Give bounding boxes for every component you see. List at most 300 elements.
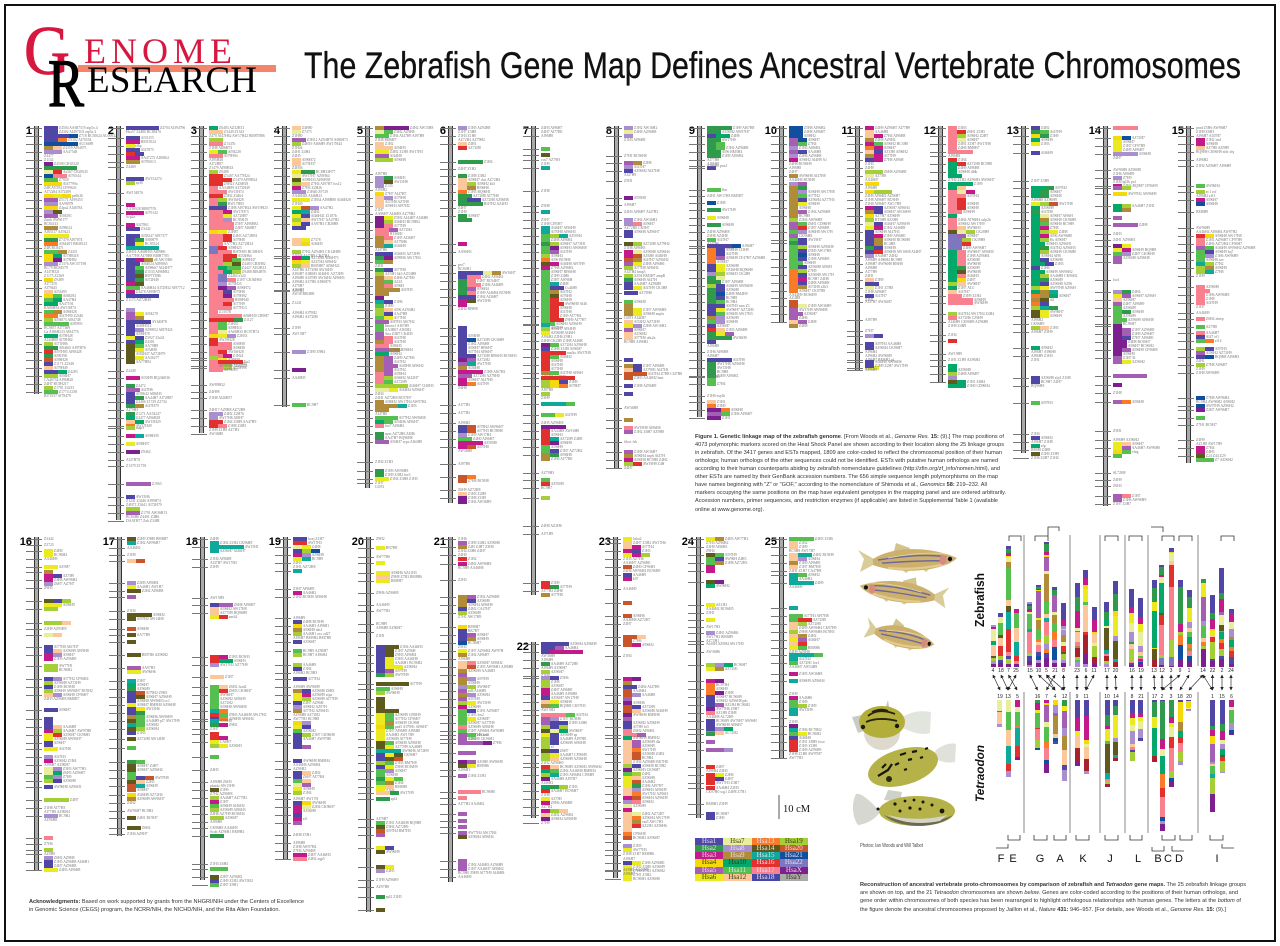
linkage group 15: AI47 zf1: [1206, 335, 1219, 339]
linkage group 9: AI96H8: [726, 320, 738, 324]
linkage group 16: AZ9H9: [44, 852, 55, 856]
linkage group 23: AW96H9 BM9H2: [633, 736, 660, 740]
linkage group 23: [599, 536, 670, 881]
legend: human chromosome colour key: Hsa21: [785, 851, 803, 859]
linkage group 5: Z4H2 AW15H8: [410, 126, 433, 130]
linkage group 6: Z1H6 AI46H9: [482, 283, 503, 287]
linkage group 25: AZ72H8: [813, 618, 826, 622]
linkage group 19: Z1H1 AZ72H8: [293, 565, 315, 569]
linkage group 3: AA68H35 BC97H74: [228, 330, 259, 334]
linkage group 20: AW17H9: [400, 791, 414, 795]
linkage group 23: Z1H6 AZ96H0: [642, 861, 664, 865]
linkage group 17: Z4H1 BC9H7: [137, 816, 158, 820]
linkage group 5: AI84H1: [394, 176, 406, 180]
linkage group 1: Z4283: [68, 370, 78, 374]
linkage group 5: Z1H2: [385, 142, 394, 146]
linkage group 15: Z1H7: [1196, 305, 1205, 309]
linkage group 7: Z4H7 AI77H0: [541, 130, 562, 134]
linkage group 5: Z1H9 AW96H8: [385, 469, 408, 473]
linkage group 6: AZ72H8 AZ96H8: [482, 198, 509, 202]
linkage group 19: AA46H9: [303, 663, 316, 667]
linkage group 23: AI96H8 BC9H2: [642, 764, 666, 768]
linkage group 9: 9: [689, 125, 695, 137]
linkage group 3: AI79H80 AI96H58: [219, 364, 247, 368]
linkage group 17: AW15H6: [146, 707, 160, 711]
linkage group 21: AI96H1: [458, 768, 470, 772]
linkage group 10: AI96H7: [808, 138, 820, 142]
linkage group 7: AI96 BC9H8: [551, 258, 570, 262]
linkage group 7: Z1H9 Z4H6: [551, 274, 569, 278]
linkage group 16: Z4H8 AW96H2: [54, 578, 77, 582]
linkage group 18: [186, 536, 267, 887]
linkage group 2: AI64024 AI89865: [141, 262, 168, 266]
linkage group 20: Z1H4: [395, 781, 404, 785]
linkage group 1: Z9302 AI70554: [68, 138, 91, 142]
linkage group 11: 11: [841, 125, 853, 137]
linkage group 19: Z4H3: [293, 561, 302, 565]
linkage group 7: Z5H8: [541, 204, 550, 208]
linkage group 9: AI96H8: [731, 408, 743, 412]
linkage group 2: AW17H49: [136, 424, 152, 428]
linkage group 22: AZ7H2: [541, 805, 552, 809]
linkage group 5: AI66H2 AI42H7: [394, 376, 419, 380]
linkage group 15: BM8H9: [1196, 210, 1208, 214]
linkage group 7: AI96H8: [560, 306, 572, 310]
linkage group 19: AZ96H9 AI77H9: [312, 697, 338, 701]
linkage group 5: Z7H7 AI47H7: [385, 192, 406, 196]
linkage group 25: AI96H2: [808, 573, 820, 577]
linkage group 19: 19: [269, 536, 281, 548]
linkage group 23: AZ96H9 dla: [642, 740, 660, 744]
linkage group 11: Z4H9 AI96H2 AZ96H7: [865, 194, 900, 198]
linkage group 5: AI84H3 BC9H82: [394, 220, 420, 224]
linkage group 9: AW36H9: [733, 336, 747, 340]
linkage group 14: AA46H7 AW96H0: [1132, 446, 1160, 450]
linkage group 10: AI96H9 AW17H8: [808, 190, 835, 194]
linkage group 3: Z470 AI47H62 AW17H42 BM87H86: [209, 134, 265, 138]
linkage group 21: AZ96H9 AI96H8: [468, 725, 494, 729]
linkage group 3: AI96H8: [233, 346, 245, 350]
linkage group 20: Z3H4 AZ72H9: [386, 825, 408, 829]
linkage group 16: Z1H8 BC9H8: [54, 685, 75, 689]
linkage group 17: AI79H2 Z9H3: [146, 691, 167, 695]
linkage group 6: AI96H7: [468, 214, 480, 218]
legend: human chromosome colour key: Hsa15: [757, 851, 775, 859]
linkage group 24: AW77H6 Z9H7: [716, 707, 739, 711]
linkage group 6: Z4H8: [458, 386, 467, 390]
linkage group 23: AW17H2 AZ96H: [642, 792, 668, 796]
linkage group 19: AI96H8: [312, 553, 324, 557]
linkage group 6: AI77H2: [458, 411, 470, 415]
caption: reconstruction: Reconstruction of ancestral vertebrate proto-chromosomes by comparison of zebrafish and Tetraodon gene maps. The 25 zebrafish linkage groups: [860, 882, 1246, 888]
linkage group 10: Z1H8 AI96H9: [808, 257, 829, 261]
linkage group 4: Z7H4 Z2H26: [302, 186, 322, 190]
legend: human chromosome colour key: Hsa2: [702, 844, 716, 852]
linkage group 8: AI96H8 znpfa: [643, 312, 664, 316]
linkage group 14: AI96H7 AZ96H: [1132, 294, 1156, 298]
linkage group 23: AA46H8 AZ72H7: [623, 618, 650, 622]
linkage group 17: AI96H7 AZ96H4: [137, 768, 163, 772]
text: Z1H0 CD96H4: [967, 384, 990, 388]
linkage group 8: AZ94 BM3H7 ampR: [634, 274, 665, 278]
linkage group 20: Z1H3 BM7H8: [395, 761, 417, 765]
linkage group 3: AI79H8: [233, 290, 245, 294]
linkage group 22: BC96H9 AZ96H3 AW96H4: [560, 765, 602, 769]
linkage group 16: Z2723: [44, 543, 54, 547]
linkage group 11: Z4H1: [865, 298, 874, 302]
linkage group 4: BC9H7: [307, 403, 318, 407]
linkage group 19: AA46H2: [303, 591, 316, 595]
linkage group 24: CK97H0 scg1 Z4H8 Z7H1: [706, 790, 746, 794]
linkage group 7: Z4H8 AI96H2: [551, 238, 572, 242]
linkage group 3: AW17H6 AI8H7: [219, 416, 244, 420]
linkage group 15: Z1H8 AW96H9: [1196, 371, 1219, 375]
linkage group 7: AI47H8: [560, 310, 572, 314]
linkage group 19: AI96H2 BC9H3: [293, 671, 317, 675]
linkage group 9: AZ96H9: [726, 316, 739, 320]
linkage group 14: foz1: [1113, 278, 1120, 282]
linkage group 10: Z4H8: [808, 320, 817, 324]
linkage group 3: Z9488: [219, 170, 229, 174]
text: Z7H9: [541, 821, 550, 825]
linkage group 12: AW36H9: [974, 301, 988, 305]
linkage group 11: Z1H3: [865, 162, 874, 166]
text: AW36H8: [209, 432, 223, 436]
linkage group 7: AI47H8: [551, 363, 563, 367]
linkage group 3: Z1H8 Z4H3: [228, 424, 246, 428]
linkage group 3: Z1H24: [233, 354, 243, 358]
linkage group 24: AI97H9: [725, 553, 737, 557]
linkage group 25: Z1H9 AZ96H9: [799, 748, 821, 752]
linkage group 7: AZ72H4 AZ96H8: [560, 343, 587, 347]
zebrafish chromosome numbers: 12: [1159, 668, 1165, 674]
tetraodon chromosome numbers: 8: [1131, 694, 1134, 700]
linkage group 9: BC9H4: [726, 300, 737, 304]
linkage group 6: AW16H7: [502, 271, 516, 275]
linkage group 10: Z6H1 CD96H9: [808, 222, 831, 226]
linkage group 11: AI96H8 AW16H8 AI4H7: [884, 250, 922, 254]
linkage group 17: AW96H6: [142, 670, 156, 674]
linkage group 8: AW19H8 AI96H8: [634, 426, 661, 430]
linkage group 7: AI77H9: [551, 326, 563, 330]
linkage group 10: Z7H4: [808, 142, 817, 146]
linkage group 21: Z1H2 AZ96H8: [477, 595, 499, 599]
caption: reconstruction: the figure denote the ancestral chromosomes proposed by Jaillon et al., Nature 431: 946–957. [For details, see Woods et al., Genome Res. 15: (9).]: [860, 907, 1226, 913]
linkage group 25: Z1H9: [799, 545, 808, 549]
linkage group 3: Z1479 AI98H43: [209, 166, 233, 170]
linkage group 5: epas AZ72H6 Z4H6: [385, 432, 415, 436]
linkage group 1: AI78H28: [59, 334, 73, 338]
linkage group 7: Z4H8 CK2H9 Z1H8 AI46H: [541, 339, 582, 343]
linkage group 5: Z1H7: [375, 208, 384, 212]
linkage group 3: AW89H32: [209, 383, 225, 387]
linkage group 3: Z1H8 AI26H37: [209, 396, 232, 400]
linkage group 11: AI96H7 BM6H2 pl: [865, 358, 894, 362]
linkage group 15: 15: [1172, 125, 1184, 137]
linkage group 21: Z1H6: [458, 537, 467, 541]
linkage group 6: AW36H8: [458, 449, 472, 453]
linkage group 25: AI46H8: [799, 736, 811, 740]
linkage group 9: AI46H9 AW96H8: [726, 284, 753, 288]
linkage group 15: AI96H8 zzv: [1206, 258, 1224, 262]
linkage group 8: Z2H8 AW16H2: [643, 324, 666, 328]
linkage group 18: Z2H7 AZ96H2: [220, 875, 242, 879]
linkage group 11: AI96H2 AW96H9: [865, 354, 892, 358]
tetraodon chromosome numbers: 17: [1152, 694, 1157, 700]
linkage group 4: AW17H7 AZ9H64: [302, 174, 330, 178]
zebrafish chromosome numbers: 15: [1027, 668, 1033, 674]
linkage group 9: AJ94H7: [742, 244, 754, 248]
linkage group 3: Z5407 AA77H24: [224, 174, 250, 178]
linkage group 17: Z2H9 AI96H4: [137, 581, 158, 585]
linkage group 13: AI96H0: [1050, 194, 1062, 198]
linkage group 24: AI96H9: [716, 687, 728, 691]
linkage group 12: Z4H8 AI96H7: [958, 372, 979, 376]
linkage group 21: BC9H9 AA46H8: [458, 566, 484, 570]
linkage group 14: Z1H7 Z4H7: [1113, 502, 1131, 506]
linkage group 9: AI67H3 mos Z1: [726, 304, 750, 308]
linkage group 7: AI46H7 AI96H9: [551, 226, 576, 230]
linkage group 2: AA77H8 AI78H8 BI8H7785: [126, 254, 169, 258]
linkage group 1: AI98024: [59, 226, 72, 230]
linkage group 16: AI96H7 AZ96H7: [44, 763, 70, 767]
linkage group 11: Z1H8 AI96H7 AW17H9: [865, 202, 901, 206]
linkage group 17: AI96H7: [137, 788, 149, 792]
linkage group 18: Z6H8 AI96H7: [234, 603, 255, 607]
linkage group 10: AI72H8 a3b3: [808, 285, 828, 289]
linkage group 12: AI97H4: [967, 194, 979, 198]
linkage group 6: Z1H8 Z3H2: [468, 174, 486, 178]
linkage group 4: Z7378: [311, 238, 321, 242]
linkage group 6: Z4H7 BC94H7: [477, 279, 500, 283]
linkage group 22: zf: [551, 745, 554, 749]
linkage group 18: Z4H8 AZ7H9 BC96H4: [210, 812, 245, 816]
linkage group 8: AZ96H2 AI47H8: [634, 169, 660, 173]
legend: human chromosome colour key: Hsa7: [730, 837, 745, 845]
linkage group 9: AI77H8: [707, 158, 719, 162]
linkage group 19: Z6H7 AI77H4: [303, 775, 324, 779]
linkage group 10: AZ96H4 AZ77H3: [808, 198, 835, 202]
linkage group 16: Z1H8 AI77H3: [44, 806, 65, 810]
linkage group 5: foz7 AI96H2: [385, 424, 404, 428]
linkage group 11: Z1H9: [875, 278, 884, 282]
linkage group 5: AI94H3: [394, 146, 406, 150]
linkage group 12: AI96H8: [967, 206, 979, 210]
linkage group 25: AI46H7: [808, 638, 820, 642]
linkage group 23: AW17H9: [642, 748, 656, 752]
linkage group 22: Z6H7: [560, 749, 569, 753]
linkage group 15: AI96H9: [1215, 266, 1227, 270]
linkage group 2: BI97T5H6: [145, 274, 161, 278]
linkage group 25: Z1H9: [808, 704, 817, 708]
linkage group 13: AZ96H8 zfp3 Z1H0: [1041, 376, 1071, 380]
linkage group 19: Z1H8 AW97H4: [293, 845, 316, 849]
linkage group 23: Z7H6: [633, 639, 642, 643]
linkage group 4: Z7H2 AZ94H3 CK14H89: [302, 250, 340, 254]
legend: human chromosome colour key: Hsa20: [785, 844, 803, 852]
linkage group 16: BC9H2: [59, 814, 70, 818]
linkage group 5: Z135: [385, 184, 393, 188]
linkage group 19: AZ96H2: [293, 767, 306, 771]
linkage group 5: AI96H3 AI97H2: [385, 204, 410, 208]
linkage group 25: Z9H8 AW96H8 BC9H3: [799, 630, 834, 634]
linkage group 1: Z4pa2 AI46784: [59, 206, 82, 210]
linkage group 8: [606, 125, 682, 470]
linkage group 6: Z4H1: [468, 142, 477, 146]
zebrafish chromosome numbers: 25: [1013, 668, 1019, 674]
linkage group 11: AI77H9: [884, 154, 896, 158]
linkage group 1: Z4B AY594 CF99643: [44, 186, 76, 190]
linkage group 7: AI96H3: [551, 254, 563, 258]
linkage group 12: Z4H9 AI96H8: [958, 166, 979, 170]
linkage group 14: Z4H9: [1113, 478, 1122, 482]
linkage group 23: CF96H8: [633, 832, 646, 836]
linkage group 19: Z4H2 aqp5: [308, 857, 325, 861]
linkage group 3: Z1H8 AI86H72: [209, 146, 232, 150]
linkage group 23: Z1H5 AZ7H6: [623, 557, 644, 561]
linkage group 14: AI96H7 BC96H2: [1128, 344, 1154, 348]
linkage group 2: Scp2a: [126, 215, 135, 219]
linkage group 21: pd4 AI46H9: [468, 689, 486, 693]
linkage group 21: AI96H9: [477, 637, 489, 641]
linkage group 11: Z4H1: [865, 274, 874, 278]
linkage group 19: AZ96H2: [303, 729, 316, 733]
linkage group 21: AI96H4 AI96H9: [468, 603, 493, 607]
linkage group 12: AI96H2 AW17H9: [958, 222, 985, 226]
linkage group 19: [269, 536, 338, 861]
linkage group 7: AI46H2: [560, 355, 572, 359]
linkage group 24: Z1H0: [716, 816, 725, 820]
linkage group 6: AI77H4 AI96H7: [468, 350, 493, 354]
linkage group 14: AZ96H2: [1132, 360, 1145, 364]
linkage group 22: AA46H7 CF96H9: [560, 753, 587, 757]
linkage group 23: AA46H7 AZ96H0: [623, 561, 650, 565]
linkage group 16: Z6H3 AZ96H7: [63, 771, 85, 775]
linkage group 24: BC96H7: [734, 663, 747, 667]
linkage group 1: Z4B BC8471: [44, 246, 64, 250]
linkage group 21: [434, 536, 513, 882]
linkage group 5: Z1H2 Z1H3: [375, 460, 393, 464]
linkage group 25: Z1H7 BM7H8: [799, 565, 821, 569]
linkage group 15: AI96H7 AI47H7: [1196, 134, 1221, 138]
linkage group 5: Z1H4 Z3H8 Z1H3: [390, 477, 418, 481]
linkage group 1: AI68284: [63, 294, 76, 298]
linkage group 1: Z1175 Z2369: [44, 274, 64, 278]
linkage group 3: AI77H13: [233, 306, 247, 310]
linkage group 1: Z5171 AJ99453: [59, 198, 83, 202]
linkage group 23: Z1H4 AZ96H0 BK7H8: [633, 760, 668, 764]
linkage group 7: AI70H8 AI96H3: [551, 230, 576, 234]
linkage group 5: AZ72H9: [394, 380, 407, 384]
linkage group 12: AI96H8 dldb: [958, 170, 977, 174]
linkage group 25: Z4H9: [815, 581, 824, 585]
linkage group 23: xm5 AW17H3: [642, 820, 663, 824]
linkage group 15: AI96H2: [1196, 158, 1208, 162]
linkage group 9: Z1H8: [717, 201, 726, 205]
linkage group 14: Z4H1 AZ96H1: [1113, 238, 1135, 242]
linkage group 10: AW96H8 AI47H8: [799, 174, 826, 178]
linkage group 6: AI36H8: [468, 366, 480, 370]
linkage group 3: AI98H14: [228, 326, 242, 330]
linkage group 3: Z1H87: [228, 230, 238, 234]
linkage group 22: AI46H3: [541, 781, 553, 785]
legend: human chromosome colour key: Hsa5: [702, 866, 716, 874]
linkage group 4: AI96H2 AZ7H0 AI96H79: [292, 280, 331, 284]
linkage group 22: Z1H9 Z4H6: [569, 721, 587, 725]
linkage group 14: Z4H8: [1139, 223, 1148, 227]
linkage group 8: Z4H8 AI96H6: [643, 262, 664, 266]
legend: human chromosome colour key: Hsa10: [728, 858, 746, 866]
linkage group 11: Z1H2 AI46H8: [884, 226, 905, 230]
linkage group 2: AI39642 AI86H3: [136, 392, 162, 396]
linkage group 10: CK96H8: [799, 234, 812, 238]
linkage group 3: AI79H92: [233, 294, 247, 298]
linkage group 24: AI96H7 BC96H9: [716, 695, 742, 699]
linkage group 25: Z4H2 BC9H9: [813, 553, 834, 557]
linkage group 23: AI96H4 AZ96H9: [642, 796, 668, 800]
linkage group 25: Z1H6 BC78H2: [799, 728, 822, 732]
linkage group 15: AI96H8: [1206, 202, 1218, 206]
linkage group 12: AI47H7: [958, 290, 970, 294]
linkage group 13: Z1H4: [1031, 432, 1040, 436]
linkage group 15: Z1H8: [1206, 297, 1215, 301]
linkage group 11: Z7H7: [865, 329, 874, 333]
linkage group 8: AI96H8 AZ96H7: [634, 230, 660, 234]
linkage group 25: AI96H9 AZ96H4: [799, 679, 825, 683]
linkage group 9: AI96H8: [722, 223, 734, 227]
linkage group 13: AI97H3: [1041, 401, 1053, 405]
linkage group 2: Z1963: [152, 482, 162, 486]
linkage group 23: AZ96H9: [633, 804, 646, 808]
linkage group 25: AW15H9: [799, 708, 813, 712]
linkage group 9: CF46H8 BQ96H0: [726, 268, 753, 272]
linkage group 19: Z1H4: [303, 667, 312, 671]
zebrafish chromosome numbers: 10: [1036, 668, 1041, 674]
linkage group 23: AI96H7: [623, 857, 635, 861]
linkage group 10: Z4H7: [789, 170, 798, 174]
linkage group 2: AI94278: [145, 312, 158, 316]
linkage group 10: AI96H8: [799, 206, 811, 210]
linkage group 1: Z4451: [68, 250, 78, 254]
linkage group 13: zfp: [1041, 444, 1046, 448]
zebrafish chromosome numbers: 19: [1138, 668, 1144, 674]
linkage group 3: AI72H87: [209, 162, 223, 166]
linkage group 19: AI96H9: [293, 616, 305, 620]
linkage group 3: AI77H9: [233, 302, 245, 306]
linkage group 17: AI96H7: [137, 683, 149, 687]
text: BI71937 AI78478: [44, 394, 71, 398]
linkage group 21: Z1H7 AZ96H4 AW97H: [468, 649, 503, 653]
linkage group 1: AI7H8418: [63, 254, 78, 258]
linkage group 3: Z9488 BI84H76: [242, 270, 266, 274]
linkage group 1: AI85991: [70, 322, 83, 326]
linkage group 2: Z4301: [145, 340, 155, 344]
linkage group 1: AU16689: [79, 142, 93, 146]
linkage group 15: Z1H9: [1196, 274, 1205, 278]
linkage group 17: Z2H9 Z9H8 BM8H7: [137, 537, 168, 541]
linkage group 13: CK96H9: [1031, 322, 1044, 326]
linkage group 8: fdzcr fsk: [624, 440, 637, 444]
linkage group 11: AZ7H8: [875, 174, 886, 178]
linkage group 9: Z3H9: [717, 404, 726, 408]
linkage group 25: Z4H9 AZ9H8: [789, 650, 810, 654]
linkage group 12: Z1H4: [958, 158, 967, 162]
linkage group 16: Z4H7: [70, 798, 79, 802]
linkage group 25: Z1H8 Z1H8 AW97H7: [789, 752, 822, 756]
linkage group 23: AA46H2: [642, 780, 655, 784]
linkage group 10: Z5H9 AW17H8: [808, 249, 831, 253]
linkage group 12: AI96H9: [974, 298, 986, 302]
